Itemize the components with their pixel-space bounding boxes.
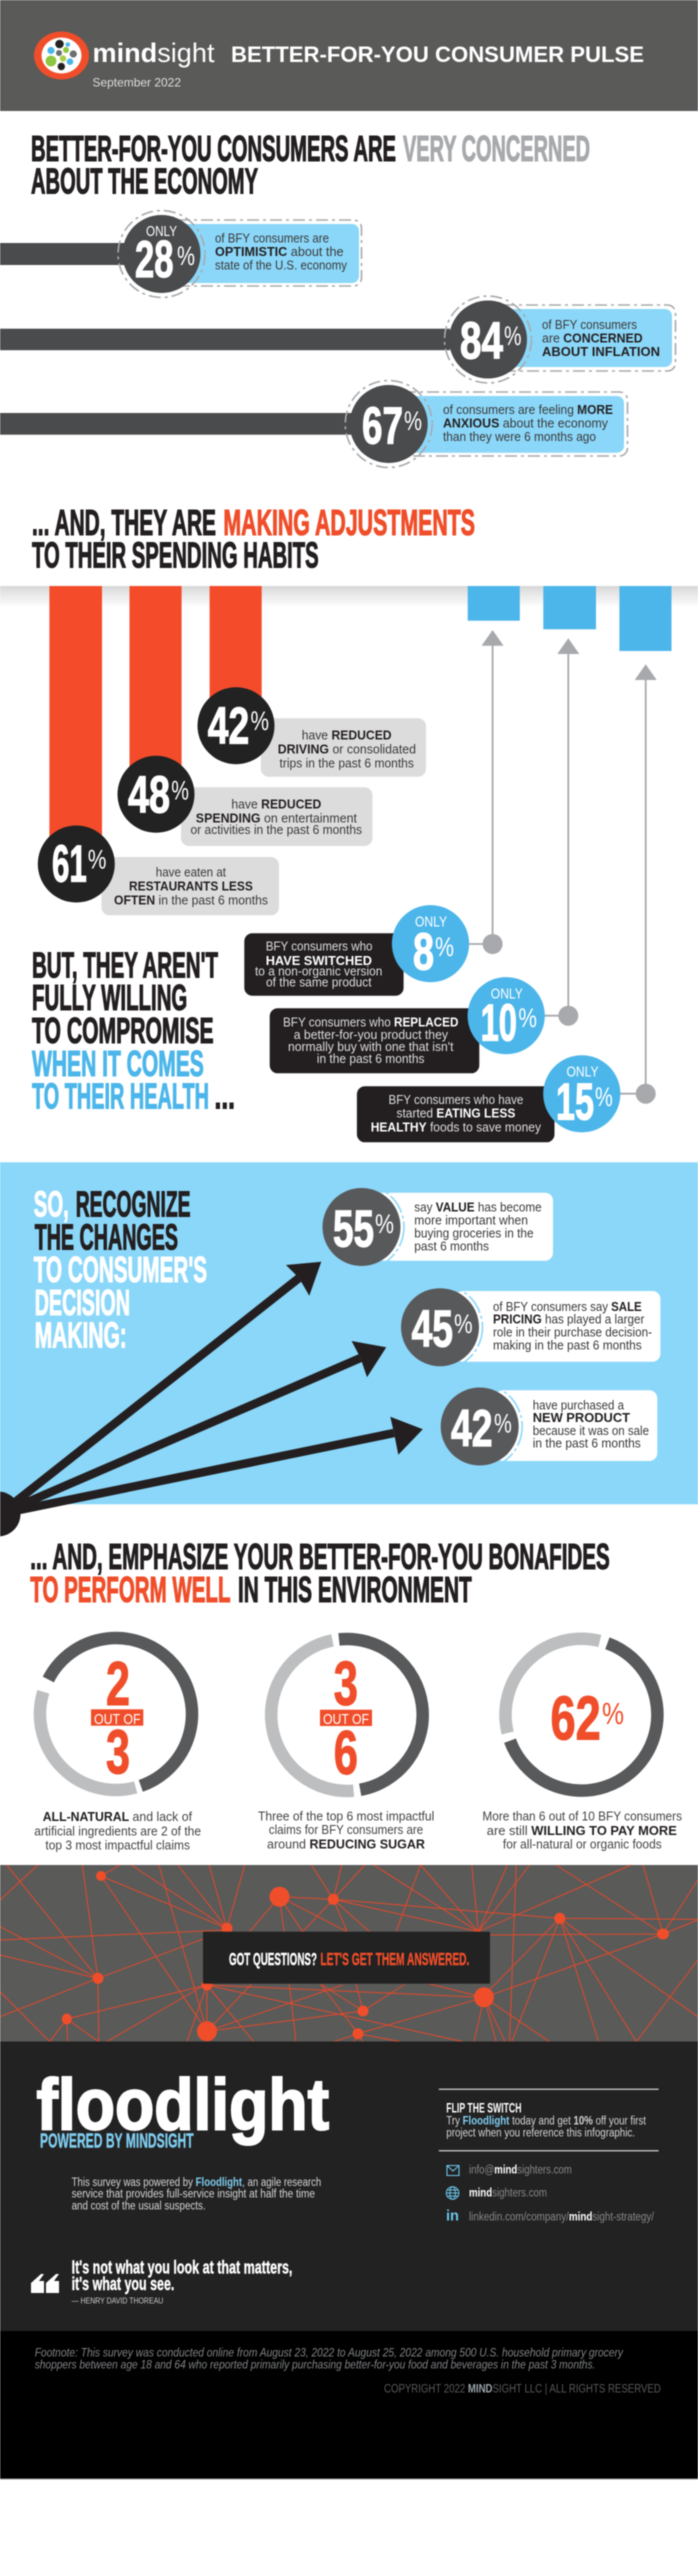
panel: flip the switch: Try Floodlight today and get 10% off your first [446,2116,647,2128]
stat: 45% sale pricing: of BFY consumers say SALE [493,1299,642,1314]
caption: willing to pay more: More than 6 out of 10 BFY consumers [482,1809,682,1824]
stat: only 10% replaced: BFY consumers who REPLACED [283,1015,458,1030]
heading: making adjustments [32,502,475,576]
caption: reducing sugar: around REDUCING SUGAR [267,1836,426,1851]
stat: 45% sale pricing: 45 [412,1301,453,1359]
stat: only 8% switched: to a non-organic version [255,964,382,979]
text: anxious: of consumers are feeling MORE [443,402,613,417]
stat: only 15% eating less healthy: HEALTHY foods to save money [371,1120,541,1135]
icon: quote mark [31,2274,59,2293]
text: inflation: of BFY consumers [542,317,637,332]
stat: 48% reduced spending: 48 [128,766,170,824]
heading: not willing to compromise: BUT, THEY AREN'T [32,944,218,985]
donut: 3 out of 6: 3 [334,1650,358,1719]
stat: 61% restaurants less often: RESTAURANTS LESS [129,879,253,894]
callout: got questions: GOT QUESTIONS? [229,1949,317,1969]
contact: email: info@mindsighters.com [469,2164,572,2176]
logo: floodlight: floodlight [36,2065,329,2145]
caption: reducing sugar: Three of the top 6 most impactful [258,1809,434,1824]
heading: very concerned: ABOUT THE ECONOMY [31,161,258,202]
heading: not willing to compromise: TO COMPROMISE [32,1010,214,1051]
panel: flip the switch: FLIP THE SWITCH [446,2100,522,2116]
stat: only 8% switched: 8 [413,923,434,981]
panel: footnote [0,2331,698,2480]
panel: network call to action [0,1865,698,2042]
heading: very concerned [31,128,590,202]
stat: 67% more anxious: % [404,406,422,436]
stat: 84% concerned about inflation: % [504,321,522,351]
panel: footer dark [0,2042,698,2332]
heading: recognize the changes: SO, [34,1183,69,1224]
network nodes [62,1871,669,2041]
stat: only 15% eating less healthy: % [595,1082,613,1112]
donut: 2 out of 3: 3 [106,1718,130,1787]
footnote text [35,2348,624,2372]
stat: only 15% eating less healthy [357,1055,620,1142]
donut: 62%: 62 [550,1684,601,1753]
title: BETTER-FOR-YOU CONSUMER PULSE [231,42,644,67]
stat: 55% value: more important when [414,1213,528,1228]
stat: 48% reduced spending [118,756,372,846]
stat: 84% concerned about inflation [0,296,676,383]
donut: 2 out of 3: OUT OF [94,1711,140,1728]
callout: got questions [203,1932,490,1984]
heading: making adjustments: TO THEIR SPENDING HABITS [32,535,319,576]
stat: 67% more anxious [0,380,628,468]
quote: — HENRY DAVID THOREAU [72,2296,163,2306]
stat: 55% value: buying groceries in the [414,1226,534,1241]
stat: only 10% replaced [270,977,545,1073]
stat: 48% reduced spending: have REDUCED [231,796,321,811]
text: inflation: are CONCERNED [542,331,643,346]
donut: 3 out of 6: 6 [334,1719,358,1788]
heading: recognize the changes [34,1183,207,1356]
heading: recognize the changes: MAKING: [35,1315,127,1356]
contact: linkedin: in [446,2208,459,2224]
stat: 42% new product: 42 [451,1400,493,1458]
stat: only 10% replaced: % [518,1003,537,1033]
shadow band [0,586,698,607]
stat: only 8% switched: BFY consumers who [266,939,372,954]
heading: not willing to compromise: TO THEIR HEALTH [32,1076,209,1117]
stat: 42% reduced driving: DRIVING or consolidated [278,741,416,756]
stat: 45% sale pricing [398,1285,660,1370]
heading: emphasize bonafides: IN THIS ENVIRONMENT [238,1569,472,1610]
blue bar chart: compromises [468,586,672,651]
stat: only 10% replaced: 10 [481,995,517,1053]
caption: all-natural: ALL-NATURAL and lack of [43,1809,192,1824]
text: anxious [443,402,613,444]
text: optimistic [215,231,347,272]
stat: 48% reduced spending: SPENDING on entertainment [196,810,357,825]
arrows: burst from origin [0,1262,423,1536]
stat: only 10% replaced: in the past 6 months [317,1051,425,1066]
stat: 55% value: past 6 months [414,1239,489,1254]
caption: willing to pay more [482,1809,682,1852]
stat: only 8% switched: HAVE SWITCHED [266,953,372,968]
donut: 2 out of 3 [40,1638,192,1790]
text: inflation: ABOUT INFLATION [542,344,660,359]
donut: 62% [505,1639,657,1791]
heading: very concerned: BETTER-FOR-YOU CONSUMERS ARE [31,128,396,169]
stat: only 15% eating less healthy: started EATING LESS [396,1106,516,1121]
caption: reducing sugar: claims for BFY consumers are [269,1822,423,1837]
stat: only 15% eating less healthy: 15 [556,1073,594,1131]
stat: only 10% replaced: normally buy with one that isn't [288,1039,454,1054]
heading: not willing to compromise: FULLY WILLING [32,977,187,1018]
stat: only 8% switched: % [435,932,454,962]
heading: not willing to compromise: ... [214,1076,235,1117]
stat: 42% new product: because it was on sale [533,1423,649,1438]
heading: making adjustments: MAKING ADJUSTMENTS [223,502,475,543]
arrow: 8% up to bar [469,630,504,954]
contact: website [446,2187,547,2200]
icon: mindsight logo [34,32,89,80]
stat: 55% value [319,1184,553,1270]
heading: not willing to compromise [32,944,235,1117]
text: anxious: than they were 6 months ago [443,429,596,444]
stat: 55% value: % [375,1209,394,1239]
footnote text: Footnote: This survey was conducted online from August 23, 2022 to August 25, 2022 among 500 U.S. household primary grocery [35,2348,624,2360]
stat: 55% value: 55 [333,1201,374,1259]
heading: recognize the changes: TO CONSUMER'S [34,1249,207,1290]
contact: website: mindsighters.com [469,2188,547,2200]
stat: only 15% eating less healthy: ONLY [566,1064,598,1081]
caption: all-natural: top 3 most impactful claims [45,1837,190,1852]
stat: 84% concerned about inflation: 84 [460,312,503,370]
caption: willing to pay more: are still WILLING TO PAY MORE [487,1823,677,1838]
stat: 61% restaurants less often [38,826,279,915]
donut: 62%: % [602,1696,624,1731]
stat: 45% sale pricing: PRICING has played a larger [493,1312,645,1327]
donut: 2 out of 3: 2 [106,1650,130,1719]
heading: emphasize bonafides [30,1536,610,1610]
caption: reducing sugar [258,1809,434,1851]
caption: all-natural: artificial ingredients are 2 of the [34,1824,201,1839]
contact: linkedin [446,2208,655,2224]
stat: 42% new product: % [494,1409,512,1439]
caption: willing to pay more: for all-natural or organic foods [503,1837,662,1852]
stat: 28% optimistic: 28 [135,231,174,289]
text: inflation [542,317,660,359]
stat: 42% reduced driving: have REDUCED [302,727,392,742]
stat: 48% reduced spending: or activities in the past 6 months [190,822,362,837]
stat: 48% reduced spending: % [171,775,189,805]
stat: 42% new product: have purchased a [533,1398,625,1413]
quote: It's not what you look at that matters, [72,2257,292,2277]
text: survey description: service that provides full-service insight at half the time [72,2189,315,2201]
stat: 28% optimistic: ONLY [146,223,177,240]
callout: got questions: LET'S GET THEM ANSWERED. [320,1949,469,1969]
stat: 45% sale pricing: making in the past 6 months [493,1337,642,1352]
stat: 42% reduced driving: % [250,706,269,736]
heading: recognize the changes: RECOGNIZE [76,1183,190,1224]
stat: 61% restaurants less often: OFTEN in the past 6 months [114,893,268,908]
text: survey description: and cost of the usual suspects. [72,2200,206,2212]
text: survey description: This survey was powered by Floodlight, an agile research [72,2177,321,2189]
heading: emphasize bonafides: TO PERFORM WELL [30,1569,231,1610]
donut: 3 out of 6: OUT OF [323,1711,369,1728]
heading: making adjustments: ... AND, THEY ARE [32,502,216,543]
logo wordmark: mindsight [92,38,215,68]
stat: 28% optimistic: % [177,241,195,271]
caption: all-natural [34,1809,201,1852]
donut: 3 out of 6 [271,1639,423,1791]
heading: recognize the changes: DECISION [35,1282,130,1323]
logo: floodlight: POWERED BY MINDSIGHT [40,2130,194,2152]
heading: recognize the changes: THE CHANGES [35,1216,178,1257]
stat: 67% more anxious: 67 [362,397,403,455]
stat: 42% new product: NEW PRODUCT [533,1410,630,1425]
text: optimistic: of BFY consumers are [215,231,329,246]
stat: 61% restaurants less often: 61 [52,836,87,894]
panel: flip the switch: project when you reference this infographic. [446,2128,635,2140]
text: optimistic: OPTIMISTIC about the [215,244,344,259]
stat: 45% sale pricing: role in their purchase decision- [493,1325,652,1340]
panel: flip the switch [439,2089,659,2151]
stat: 55% value: say VALUE has become [414,1200,542,1215]
stat: 42% reduced driving: trips in the past 6 months [280,755,414,770]
stat: only 10% replaced: ONLY [491,985,523,1002]
stat: 45% sale pricing: % [454,1309,473,1339]
copyright: COPYRIGHT 2022 MINDSIGHT LLC | ALL RIGHTS RESERVED [384,2383,661,2395]
stat: 61% restaurants less often: have eaten at [156,865,226,880]
stat: 42% reduced driving: 42 [208,697,249,755]
arrow: 10% up to bar [544,638,579,1026]
quote [72,2257,292,2306]
stat: 42% new product [437,1384,657,1469]
heading: not willing to compromise: WHEN IT COMES [32,1043,204,1084]
date: September 2022 [92,76,181,90]
red bar chart: spending adjustments [49,586,262,864]
stat: only 8% switched: of the same product [266,975,372,990]
header band [0,0,698,111]
stat: only 10% replaced: a better-for-you product they [294,1027,448,1042]
stat: 42% new product: in the past 6 months [533,1436,641,1451]
stat: only 8% switched: ONLY [415,914,447,931]
contact: linkedin: linkedin.com/company/mindsight-strategy/ [469,2212,655,2224]
stat: only 8% switched [244,905,469,996]
arrow: 15% up to bar [620,664,657,1104]
stat: 61% restaurants less often: % [88,844,106,874]
quote: it's what you see. [72,2274,174,2294]
panel: decision making [0,1162,698,1504]
stat: only 15% eating less healthy: BFY consumers who have [388,1092,523,1107]
text: anxious: ANXIOUS about the economy [443,416,608,431]
text: optimistic: state of the U.S. economy [215,257,347,272]
footnote text: shoppers between age 18 and 64 who reported primarily purchasing better-for-you food and beverages in the past 3 months. [35,2360,595,2372]
stat: 28% optimistic [0,210,362,298]
stat: 42% reduced driving [198,687,426,777]
text: survey description [72,2177,321,2212]
